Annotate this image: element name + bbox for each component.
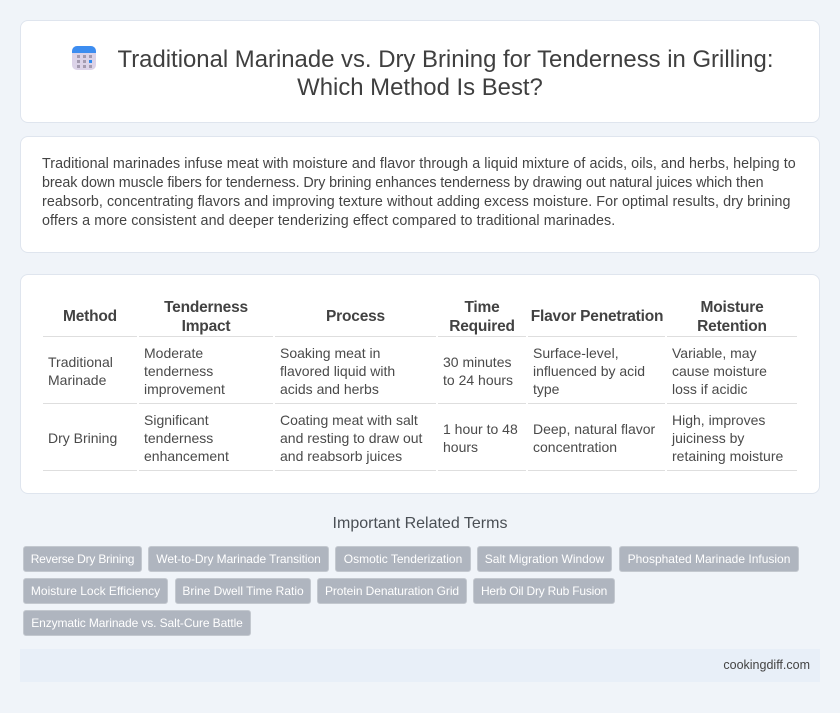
table contents: Coating meat with salt	[280, 412, 418, 428]
table contents: Tenderness	[164, 299, 248, 316]
related term tags: Enzymatic Marinade vs. Salt-Cure Battle	[31, 616, 243, 630]
title	[118, 46, 773, 101]
table contents: juiciness by	[672, 430, 744, 446]
table contents: 1 hour to 48	[443, 421, 518, 437]
table contents: enhancement	[144, 448, 229, 464]
panel: comparison table	[20, 274, 820, 494]
panel: intro paragraph	[20, 136, 820, 253]
table contents: influenced by acid	[533, 363, 645, 379]
footer credit: cookingdiff.com	[723, 658, 810, 672]
table contents: Impact	[182, 318, 230, 335]
panel: header	[20, 20, 820, 123]
intro text	[42, 156, 796, 229]
table contents: retaining moisture	[672, 448, 783, 464]
table contents: hours	[443, 439, 478, 455]
table contents: improvement	[144, 381, 225, 397]
table contents: Variable, may	[672, 345, 757, 361]
related term tags: Herb Oil Dry Rub Fusion	[481, 584, 607, 598]
table contents: Process	[326, 308, 385, 325]
table contents: 30 minutes	[443, 354, 511, 370]
table contents: Dry Brining	[48, 430, 117, 446]
table contents: and resting to draw out	[280, 430, 422, 446]
related term tags: Protein Denaturation Grid	[325, 584, 459, 598]
table contents: Moderate	[144, 345, 203, 361]
table contents: Required	[449, 318, 515, 335]
intro text: break down muscle fibers for tenderness. Dry brining enhances tenderness by drawing out natural juices which then	[42, 175, 763, 191]
related term tags: Phosphated Marinade Infusion	[628, 552, 790, 566]
intro text: Traditional marinades infuse meat with moisture and flavor through a liquid mixture of acids, oils, and herbs, helping to	[42, 156, 796, 172]
table contents: acids and herbs	[280, 381, 379, 397]
footer bar	[20, 649, 820, 682]
table contents: Surface-level,	[533, 345, 619, 361]
intro text: offers a more consistent and deeper tenderizing effect compared to traditional marinades.	[42, 213, 615, 229]
heading: related terms: Important Related Terms	[333, 515, 507, 532]
related term tags: Reverse Dry Brining	[31, 552, 134, 566]
table contents: Flavor Penetration	[531, 308, 663, 325]
intro text: reabsorb, concentrating flavors and improving texture without adding excess moisture. For optimal results, dry brining	[42, 194, 790, 210]
table contents: concentration	[533, 439, 617, 455]
table contents: and reabsorb juices	[280, 448, 402, 464]
related term tags: Osmotic Tenderization	[344, 552, 462, 566]
table contents: Traditional	[48, 354, 113, 370]
icon: calendar	[72, 46, 96, 70]
table contents: flavored liquid with	[280, 363, 395, 379]
table contents: type	[533, 381, 559, 397]
table contents: Retention	[697, 318, 767, 335]
table contents: High, improves	[672, 412, 765, 428]
table contents: cause moisture	[672, 363, 767, 379]
table contents: Method	[63, 308, 117, 325]
title: Traditional Marinade vs. Dry Brining for Tenderness in Grilling:	[118, 46, 773, 73]
table contents: to 24 hours	[443, 372, 513, 388]
table contents: Deep, natural flavor	[533, 421, 655, 437]
related term tags	[23, 546, 799, 636]
table contents: Marinade	[48, 372, 106, 388]
title: Which Method Is Best?	[297, 74, 543, 101]
table contents: Time	[464, 299, 500, 316]
table contents: tenderness	[144, 363, 213, 379]
table contents: loss if acidic	[672, 381, 747, 397]
related term tags: Wet-to-Dry Marinade Transition	[156, 552, 321, 566]
table contents: Soaking meat in	[280, 345, 380, 361]
related term tags: Brine Dwell Time Ratio	[182, 584, 304, 598]
table contents: Significant	[144, 412, 209, 428]
table contents: Moisture	[700, 299, 764, 316]
table contents: tenderness	[144, 430, 213, 446]
related term tags: Salt Migration Window	[485, 552, 604, 566]
related term tags: Moisture Lock Efficiency	[31, 584, 160, 598]
